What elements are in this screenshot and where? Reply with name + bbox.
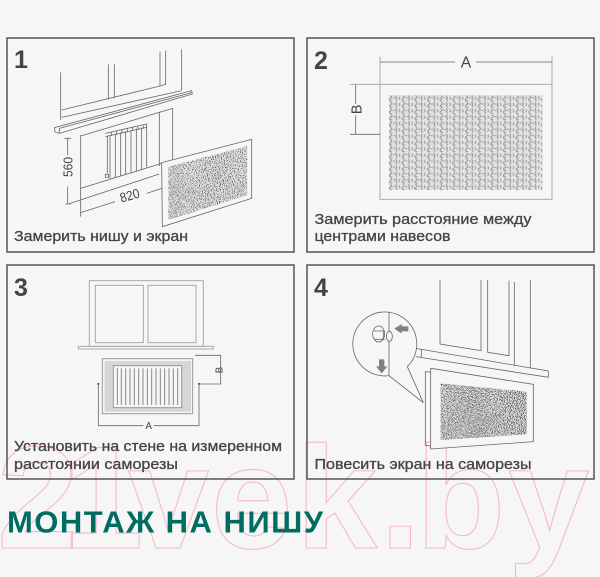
dimension label 560: 560	[60, 157, 75, 177]
caption step 3: Установить на стене на измеренном	[14, 438, 282, 455]
panel: step 3	[7, 265, 294, 479]
panel: step 2	[307, 38, 594, 252]
dimension label A: A	[145, 421, 152, 432]
watermark: 21vek.by	[0, 416, 589, 577]
window	[78, 281, 213, 349]
panel: step 1	[7, 38, 294, 252]
screen	[425, 368, 533, 449]
panel: step 4	[307, 265, 594, 479]
illustration: measuring distance	[349, 55, 552, 199]
dimension label B: B	[349, 104, 365, 114]
dimension label 820: 820	[118, 186, 141, 206]
caption step 2 line 2: центрами навесов	[314, 228, 451, 245]
title: МОНТАЖ НА НИШУ	[7, 504, 324, 540]
arrow: down	[376, 359, 387, 373]
screws and dimensions	[97, 355, 221, 426]
step number 2: 2	[314, 47, 328, 75]
callout with bolt detail	[353, 312, 423, 403]
caption step 4: Повесить экран на саморезы	[314, 456, 532, 473]
screen	[162, 139, 252, 227]
caption step 1: Замерить нишу и экран	[14, 228, 188, 245]
caption step 2: Замерить расстояние между	[314, 211, 532, 228]
dimension label B: B	[215, 367, 226, 373]
illustration: window and radiator front view	[78, 281, 226, 432]
radiator recess	[102, 359, 193, 414]
caption step 3 line 2: расстоянии саморезы	[14, 456, 178, 473]
illustration: niche with radiator and screen	[54, 49, 252, 227]
illustration: hanging the screen	[353, 280, 548, 449]
radiator	[105, 123, 147, 179]
screen grille	[389, 95, 542, 190]
window and sill	[416, 280, 548, 377]
dimension label A: A	[461, 55, 472, 72]
step number 1: 1	[14, 46, 28, 74]
step number 3: 3	[14, 274, 28, 302]
step number 4: 4	[314, 274, 328, 302]
arrow: left	[394, 324, 408, 334]
